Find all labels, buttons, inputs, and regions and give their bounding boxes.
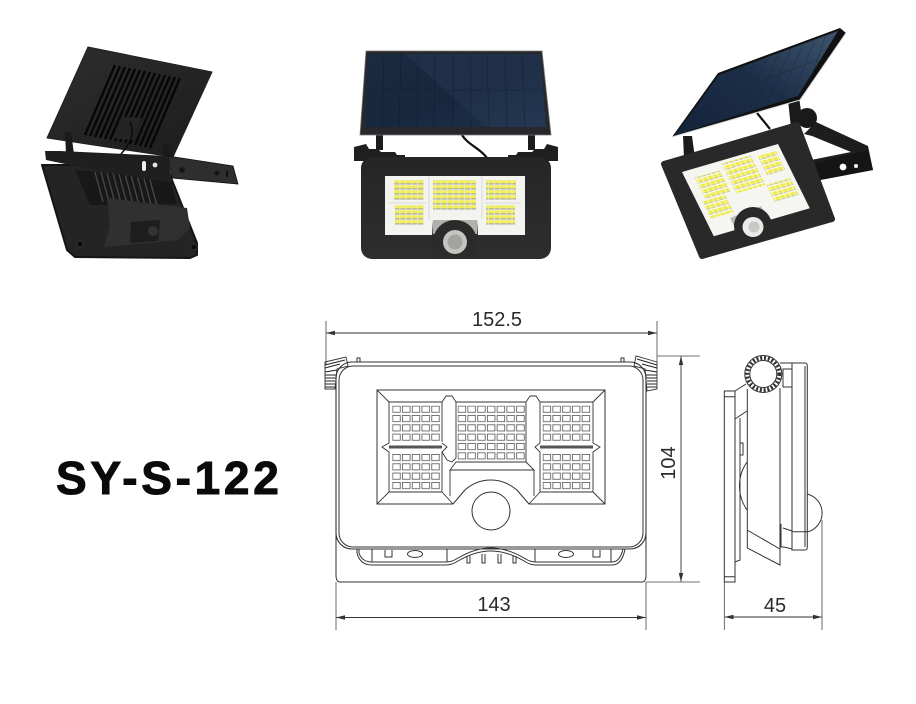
- left lower LED grid: [392, 454, 441, 491]
- technical drawing: front elevation: [325, 356, 657, 582]
- mounting arm: [747, 388, 780, 565]
- bracket bar: [45, 151, 172, 183]
- back plate: [336, 530, 646, 582]
- dimension: width 143: [336, 582, 646, 630]
- corner screws: [77, 241, 83, 247]
- front housing: [780, 363, 807, 550]
- housing: [361, 157, 551, 259]
- motion sensor: [730, 206, 771, 237]
- heat-sink ribs: [75, 170, 177, 205]
- LED panel: [385, 176, 525, 235]
- housing inner outline: [339, 366, 643, 547]
- dimension: width 152.5: [326, 309, 657, 365]
- product photo: rear view: [42, 47, 238, 258]
- solar panel: [672, 28, 846, 137]
- cable: [121, 122, 132, 154]
- dimension: depth 45: 45: [764, 595, 786, 617]
- panel posts: [65, 132, 171, 158]
- right lower LED grid: [543, 454, 591, 491]
- reflector bevels: [377, 390, 605, 504]
- panel bulge: [739, 462, 747, 510]
- sensor circle: [472, 492, 510, 530]
- dimension: width 152.5: 152.5: [472, 309, 522, 331]
- notch shade: [433, 220, 477, 234]
- left hinge knurl: [325, 357, 348, 389]
- motion sensor: [433, 220, 477, 259]
- product photo: front view: [354, 51, 558, 259]
- panel posts: [683, 97, 803, 158]
- panel dividers: [389, 176, 521, 219]
- switch details: [385, 550, 600, 563]
- motion sensor dome: [807, 494, 822, 532]
- hinge knob: [797, 108, 817, 128]
- lower battery housing: [357, 549, 625, 565]
- LED blocks: [394, 180, 516, 225]
- product photo: angled view: [664, 28, 873, 262]
- hinges: [354, 144, 558, 161]
- dimension: depth 45: [724, 520, 822, 630]
- dimension: width 143: 143: [477, 594, 511, 616]
- bracket: [804, 122, 873, 181]
- bracket holes: [142, 161, 228, 177]
- solar panel back: [47, 47, 212, 157]
- vent slots: [85, 65, 180, 148]
- panel posts: [376, 134, 535, 150]
- right upper LED grid: [543, 406, 591, 443]
- left upper LED grid: [392, 406, 441, 443]
- cable: [757, 113, 770, 129]
- vent centre tab: [114, 117, 142, 140]
- bracket strip: [168, 156, 238, 184]
- LED panel outline: [377, 390, 605, 504]
- dimension: height 104: [646, 356, 700, 582]
- right hinge knurl: [634, 356, 657, 391]
- technical drawing: side elevation: [724, 356, 822, 582]
- centre LED grid: [458, 406, 526, 461]
- LED panel: [682, 144, 810, 236]
- dimension: height 104: 104: [658, 446, 680, 480]
- housing: [664, 125, 832, 256]
- housing: [42, 165, 197, 258]
- connectors: [781, 369, 792, 549]
- solar panel side: [724, 384, 747, 582]
- LED blocks: [688, 148, 799, 220]
- mounting block: [104, 198, 190, 247]
- solar panel: [360, 51, 551, 135]
- knurled knob: [745, 356, 782, 392]
- top pins: [357, 358, 624, 362]
- housing outer outline: [336, 362, 646, 549]
- cable: [462, 135, 487, 158]
- title: model number: SY-S-122: [56, 452, 282, 504]
